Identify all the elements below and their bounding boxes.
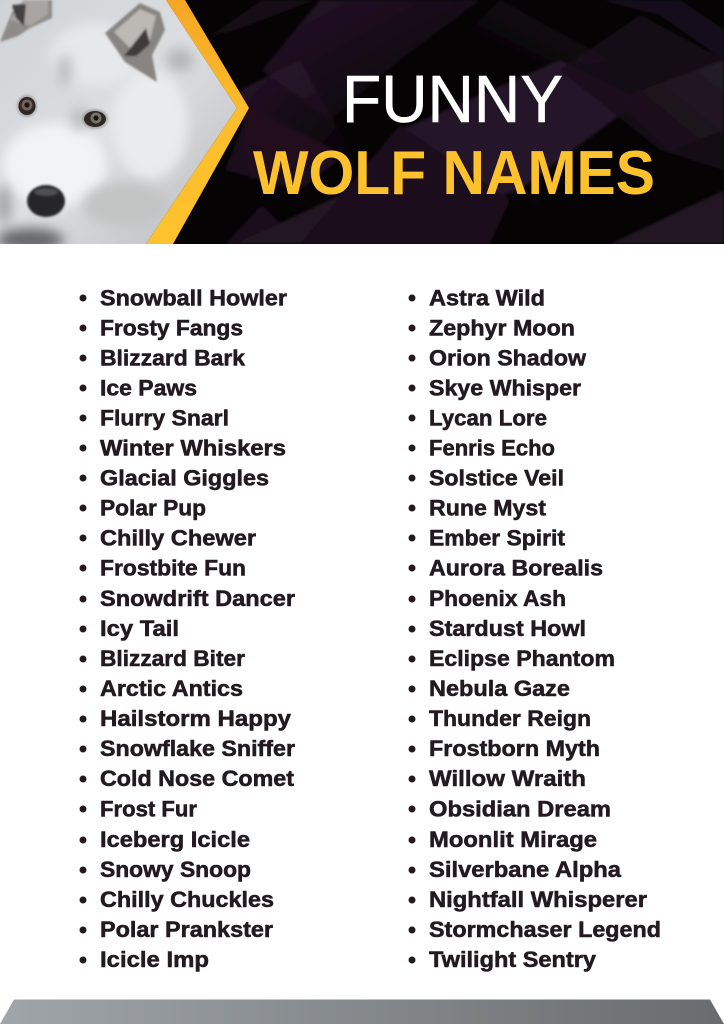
left name list: Polar Prankster [100, 917, 273, 942]
left name list: Frosty Fangs [100, 316, 243, 340]
left name list: Winter Whiskers [100, 436, 286, 460]
right name list: Skye Whisper [429, 376, 581, 400]
right name list: Solstice Veil [429, 466, 564, 490]
left name list: Snowy Snoop [100, 857, 251, 882]
fur shading [0, 48, 194, 252]
left name list: Chilly Chewer [100, 526, 256, 550]
left name list: Glacial Giggles [100, 466, 269, 490]
left name list: Arctic Antics [100, 676, 243, 701]
wolf ears [0, 0, 165, 82]
left name list: Frostbite Fun [100, 556, 246, 580]
right name list: Nightfall Whisperer [429, 887, 647, 912]
left name list: Icy Tail [100, 616, 179, 641]
left name list: Snowflake Sniffer [100, 736, 295, 761]
right name list: Moonlit Mirage [429, 827, 597, 852]
right name list: Lycan Lore [429, 406, 547, 430]
right name list: Rune Myst [429, 496, 547, 520]
left name list: Chilly Chuckles [100, 887, 274, 912]
right name list: Stormchaser Legend [429, 917, 661, 942]
right name list: Astra Wild [429, 286, 545, 310]
left name list: Hailstorm Happy [100, 706, 292, 731]
left name list: Cold Nose Comet [100, 766, 295, 791]
right name list: Ember Spirit [429, 526, 566, 550]
right name list [408, 286, 661, 972]
left name list: Icicle Imp [100, 947, 209, 972]
footer grey bar [0, 1000, 724, 1024]
right name list: Silverbane Alpha [429, 857, 622, 882]
left name list: Polar Pup [100, 496, 206, 520]
right name list: Obsidian Dream [429, 796, 611, 822]
title: wolf names: WOLF NAMES [253, 139, 655, 208]
right name list: Willow Wraith [429, 766, 586, 791]
left name list: Blizzard Bark [100, 346, 246, 370]
right name list: Phoenix Ash [429, 586, 566, 611]
wolf eyes [17, 95, 108, 129]
yellow chevron [146, 0, 249, 244]
right name list: Zephyr Moon [429, 316, 575, 340]
left name list: Iceberg Icicle [100, 827, 250, 852]
right name list: Eclipse Phantom [429, 646, 615, 671]
left name list: Snowdrift Dancer [100, 586, 295, 611]
header banner [0, 0, 724, 252]
title: funny: FUNNY [342, 62, 563, 137]
left name list: Frost Fur [100, 796, 197, 822]
left name list: Flurry Snarl [100, 406, 229, 430]
right name list: Stardust Howl [429, 616, 586, 641]
left name list [80, 286, 295, 972]
right name list: Thunder Reign [429, 706, 591, 731]
wolf photo [0, 0, 240, 252]
left name list: Snowball Howler [100, 286, 287, 310]
left name list: Blizzard Biter [100, 646, 245, 671]
abstract dark background facets [210, 0, 724, 244]
right name list: Aurora Borealis [429, 556, 603, 580]
right name list: Twilight Sentry [429, 947, 597, 972]
right name list: Nebula Gaze [429, 676, 570, 701]
wolf nose [27, 185, 65, 217]
left name list: Ice Paws [100, 376, 197, 400]
right name list: Orion Shadow [429, 346, 587, 370]
right name list: Frostborn Myth [429, 736, 600, 761]
right name list: Fenris Echo [429, 436, 555, 460]
